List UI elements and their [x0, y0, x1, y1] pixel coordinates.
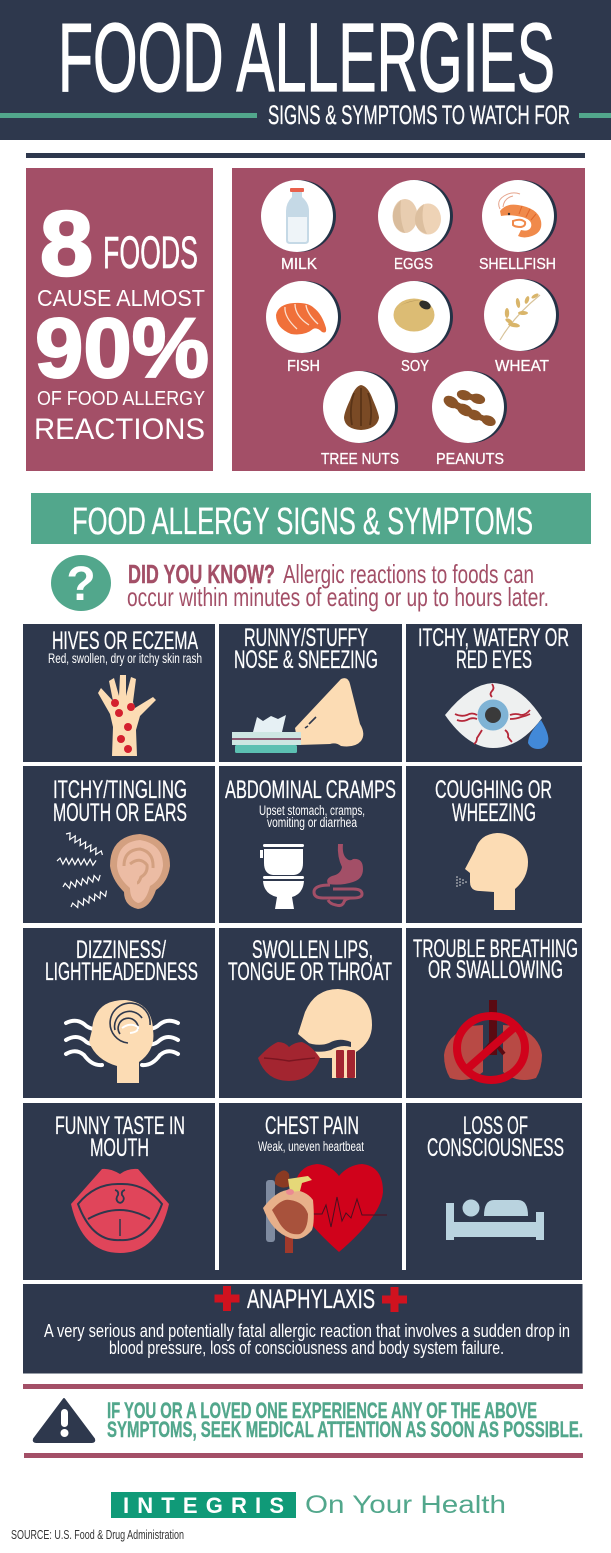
- heading: ANAPHYLAXIS: [247, 1284, 375, 1314]
- panel: funny taste: [23, 1103, 215, 1280]
- of food allergy: OF FOOD ALLERGY: [37, 388, 205, 410]
- panel: dizziness: LIGHTHEADEDNESS: [45, 958, 198, 986]
- foods label: FOODS: [103, 227, 198, 278]
- did you know text: DID YOU KNOW?: [128, 559, 275, 589]
- icon: hand with rash: [98, 675, 156, 756]
- logo: INTEGRIS On Your Health: On Your Health: [305, 1491, 506, 1519]
- food: milk: MILK: [281, 256, 317, 273]
- cause almost: CAUSE ALMOST: [37, 285, 205, 311]
- icon: swollen lips and throat: [258, 989, 372, 1081]
- panel: 8 foods statistic: [26, 168, 213, 471]
- panel: abdominal cramps: [219, 766, 402, 923]
- big number 8: 8: [40, 193, 93, 295]
- panel: coughing or wheezing: WHEEZING: [452, 799, 536, 827]
- icon: warning triangle: [34, 1399, 94, 1442]
- icon: ear with tingling: [57, 831, 170, 910]
- panel: swollen lips: TONGUE OR THROAT: [228, 958, 392, 986]
- panel: runny nose: [219, 624, 402, 762]
- icon: open mouth: [71, 1169, 169, 1253]
- panel: funny taste: MOUTH: [90, 1134, 149, 1162]
- panel: chest pain: CHEST PAIN: [265, 1112, 359, 1140]
- panel: runny nose: NOSE & SNEEZING: [234, 646, 378, 674]
- panel: hives or eczema: Red, swollen, dry or itchy skin rash: [48, 651, 202, 666]
- icon: nose and tissue box: [232, 678, 363, 753]
- food: peanuts: PEANUTS: [436, 451, 504, 468]
- icon: question mark: ?: [66, 558, 96, 611]
- icon: dizzy head: [66, 1000, 178, 1083]
- panel: runny nose: RUNNY/STUFFY: [244, 624, 368, 652]
- header banner: [0, 0, 611, 140]
- food: fish: [266, 281, 341, 375]
- icon: lungs with no sign: [444, 1000, 542, 1080]
- icon: left red cross: [214, 1286, 240, 1311]
- panel: itchy eyes: [406, 624, 582, 762]
- panel: trouble breathing: [406, 928, 582, 1098]
- panel: coughing or wheezing: [406, 766, 582, 923]
- reactions: REACTIONS: [34, 413, 205, 446]
- panel: abdominal cramps: ABDOMINAL CRAMPS: [225, 776, 396, 804]
- food: milk: [261, 180, 336, 273]
- panel: swollen lips: SWOLLEN LIPS,: [252, 936, 373, 964]
- source note: SOURCE: U.S. Food & Drug Administration: [11, 1527, 184, 1542]
- food: wheat: [484, 279, 559, 375]
- panel: loss of consciousness: [406, 1103, 582, 1280]
- food: shellfish: [479, 180, 557, 273]
- logo: INTEGRIS On Your Health: INTEGRIS: [123, 1493, 284, 1518]
- icon: question mark: [51, 555, 111, 611]
- panel: abdominal cramps: Upset stomach, cramps,: [259, 803, 365, 818]
- food: eggs: [378, 180, 453, 273]
- icon: heart with ECG: [263, 1164, 387, 1253]
- food: soy: SOY: [401, 358, 429, 375]
- panel: itchy mouth or ears: ITCHY/TINGLING: [53, 776, 187, 804]
- panel: dizziness: DIZZINESS/: [76, 936, 166, 964]
- panel: dizziness: [23, 928, 215, 1098]
- panel: eight foods: [232, 168, 585, 471]
- panel: chest pain: Weak, uneven heartbeat: [258, 1139, 364, 1154]
- big number 90%: 90%: [35, 301, 209, 395]
- icon: toilet: [260, 844, 304, 909]
- warning text: [107, 1398, 583, 1442]
- panel: funny taste: FUNNY TASTE IN: [55, 1112, 185, 1140]
- food: fish: FISH: [287, 358, 320, 375]
- warning callout: [34, 1398, 583, 1442]
- did you know callout: [51, 555, 549, 612]
- panel: itchy mouth or ears: MOUTH OR EARS: [53, 799, 187, 827]
- food: tree nuts: [321, 371, 399, 468]
- description: [44, 1321, 570, 1358]
- panel: swollen lips: [219, 928, 402, 1098]
- panel: loss of consciousness: LOSS OF: [463, 1112, 528, 1140]
- food: tree nuts: TREE NUTS: [321, 451, 399, 468]
- food: shellfish: SHELLFISH: [479, 256, 556, 273]
- panel: hives or eczema: [23, 624, 215, 762]
- description: blood pressure, loss of consciousness and body system failure.: [109, 1338, 504, 1358]
- panel: itchy mouth or ears: [23, 766, 215, 923]
- icon: coughing head: [456, 833, 528, 910]
- food: peanuts: [432, 371, 507, 468]
- panel: abdominal cramps: vomiting or diarrhea: [267, 815, 357, 830]
- did you know text: [127, 559, 549, 612]
- panel: hives or eczema: HIVES OR ECZEMA: [52, 627, 198, 655]
- food: wheat: WHEAT: [495, 358, 549, 375]
- icon: stomach and intestines: [314, 844, 363, 906]
- panel: itchy eyes: RED EYES: [456, 646, 532, 674]
- icon: red eye: [445, 683, 548, 749]
- logo: INTEGRIS On Your Health: [111, 1491, 506, 1519]
- food: eggs: EGGS: [394, 256, 433, 273]
- panel: chest pain: [219, 1103, 402, 1280]
- icon: right red cross: [382, 1287, 407, 1312]
- food: soy: [378, 281, 453, 375]
- panel: anaphylaxis: [23, 1284, 582, 1374]
- icon: bed: [446, 1200, 544, 1240]
